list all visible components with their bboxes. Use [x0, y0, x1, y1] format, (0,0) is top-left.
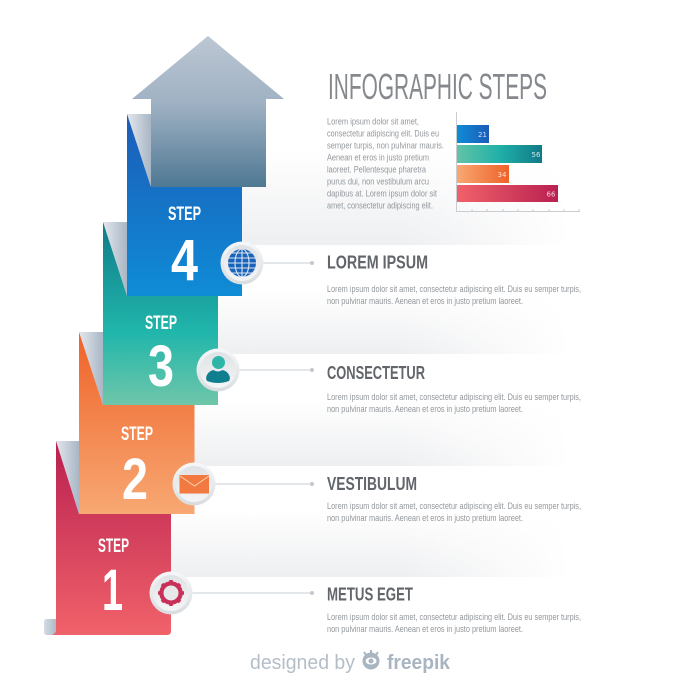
step 3 label: STEP: [145, 313, 177, 334]
intro text block: Aenean et eros in justo pretium: [327, 152, 429, 164]
step 1 number: 1: [102, 558, 123, 623]
section: lorem ipsum: Lorem ipsum dolor sit amet, consectetur adipiscing elit. Duis eu semper turpis,: [327, 284, 581, 295]
bar 21: 21: [478, 131, 487, 139]
icon: globe: [220, 242, 264, 284]
footer credit: designed by: [250, 652, 355, 674]
intro text block: semper turpis, non pulvinar mauris.: [327, 140, 444, 152]
title: INFOGRAPHIC STEPS: [328, 66, 547, 107]
connector lines: [190, 261, 314, 595]
section: metus eget: non pulvinar mauris. Aenean et eros in justo pretium laoreet.: [327, 624, 523, 635]
bar 56: 56: [532, 151, 541, 159]
section: lorem ipsum: LOREM IPSUM: [327, 252, 428, 272]
arrow pointing up: [132, 36, 284, 187]
section: vestibulum: [327, 474, 581, 524]
step 1 label: STEP: [98, 536, 129, 557]
icon: envelope: [172, 462, 216, 506]
section: consectetur: [327, 363, 581, 415]
section: metus eget: [327, 584, 581, 635]
section: vestibulum: Lorem ipsum dolor sit amet, consectetur adipiscing elit. Duis eu semper turpis,: [327, 501, 581, 512]
icon: gear: [150, 572, 192, 614]
icon: person: [196, 348, 240, 392]
step 4 label: STEP: [168, 204, 201, 225]
background shadows behind sections: [171, 145, 610, 585]
intro text block: amet, consectetur adipiscing elit.: [327, 200, 433, 212]
bar 34: 34: [498, 171, 507, 179]
intro text block: purus dui, non vestibulum arcu: [327, 176, 429, 188]
intro text block: Lorem ipsum dolor sit amet,: [327, 116, 419, 128]
icon: freepik logo: [362, 650, 380, 670]
intro text block: [327, 116, 444, 212]
section: consectetur: non pulvinar mauris. Aenean et eros in justo pretium laoreet.: [327, 404, 523, 415]
section: vestibulum: non pulvinar mauris. Aenean et eros in justo pretium laoreet.: [327, 513, 523, 524]
section: consectetur: Lorem ipsum dolor sit amet, consectetur adipiscing elit. Duis eu semper turpis,: [327, 392, 581, 403]
bar 66: 66: [547, 190, 556, 198]
section: lorem ipsum: [327, 252, 581, 307]
panel: step 4: [127, 114, 242, 296]
step 2 label: STEP: [121, 424, 153, 445]
footer credit: [250, 650, 451, 674]
section: vestibulum: VESTIBULUM: [327, 474, 417, 494]
section: consectetur: CONSECTETUR: [327, 363, 425, 383]
step 4 number: 4: [171, 228, 198, 293]
panel: step 3: [103, 222, 218, 405]
section: metus eget: METUS EGET: [327, 584, 413, 604]
intro text block: dapibus at. Lorem ipsum dolor sit: [327, 188, 437, 200]
intro text block: laoreet. Pellentesque pharetra: [327, 164, 427, 176]
section: metus eget: Lorem ipsum dolor sit amet, consectetur adipiscing elit. Duis eu semper turpis,: [327, 612, 581, 623]
intro text block: consectetur adipiscing elit. Duis eu: [327, 128, 439, 140]
step 2 number: 2: [122, 447, 148, 512]
section: lorem ipsum: non pulvinar mauris. Aenean et eros in justo pretium laoreet.: [327, 296, 523, 307]
bar chart: [456, 112, 580, 212]
panel: step 1: [44, 441, 171, 635]
panel: step 2: [79, 332, 194, 514]
step 3 number: 3: [148, 334, 174, 399]
footer credit: freepik: [387, 652, 451, 674]
